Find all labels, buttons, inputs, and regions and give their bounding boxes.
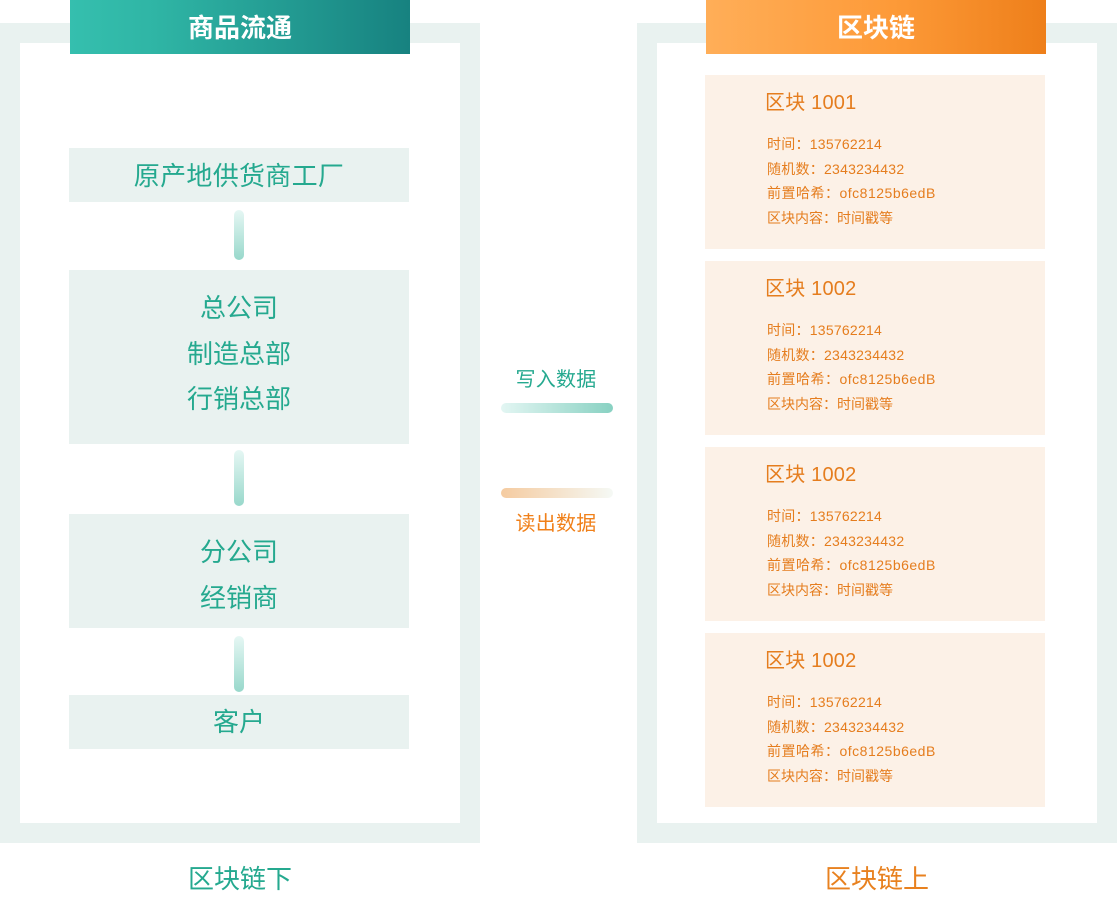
block card 1002 third: 区块内容：时间戳等 <box>767 768 893 784</box>
block card 1001: 随机数：2343234432 <box>767 161 904 177</box>
block card 1001: 区块内容：时间戳等 <box>767 210 893 226</box>
heading: blockchain: 区块链 <box>837 13 915 43</box>
panel: right blockchain frame <box>637 23 1117 843</box>
block card 1002 third: 随机数：2343234432 <box>767 719 904 735</box>
block card 1002 second: 时间：135762214 <box>767 508 882 524</box>
block card 1002 first: 区块 1002 <box>765 278 856 300</box>
block card 1002 first: 区块内容：时间戳等 <box>767 396 893 412</box>
box: customer: 客户 <box>213 707 265 737</box>
block card 1002 third: 时间：135762214 <box>767 694 882 710</box>
block card 1001: 时间：135762214 <box>767 136 882 152</box>
box: origin suppliers and factories <box>69 148 409 202</box>
block card 1002 first: 随机数：2343234432 <box>767 347 904 363</box>
box: head office <box>69 270 409 444</box>
arrow: connector two <box>234 450 244 506</box>
arrow: write data bar <box>501 403 613 413</box>
block card 1002 third: 区块 1002 <box>765 650 856 672</box>
arrow: connector one <box>234 210 244 260</box>
arrow: connector three <box>234 636 244 692</box>
caption: on-chain: 区块链上 <box>825 864 929 894</box>
box: branches and dealers: 分公司 <box>200 537 278 567</box>
block card 1002 first: 前置哈希：ofc8125b6edB <box>767 371 936 387</box>
block card 1001: 前置哈希：ofc8125b6edB <box>767 185 936 201</box>
box: head office: 总公司 <box>200 293 278 323</box>
block card 1002 first <box>705 261 1045 435</box>
caption: off-chain: 区块链下 <box>188 864 292 894</box>
block card 1002 second: 随机数：2343234432 <box>767 533 904 549</box>
block card 1002 third <box>705 633 1045 807</box>
block card 1002 second: 区块 1002 <box>765 464 856 486</box>
block card 1001 <box>705 75 1045 249</box>
block card 1002 second <box>705 447 1045 621</box>
box: origin suppliers and factories: 原产地供货商工厂 <box>134 161 344 191</box>
label: write data: 写入数据 <box>516 369 596 391</box>
box: customer <box>69 695 409 749</box>
panel: left goods circulation frame <box>0 23 480 843</box>
label: read data: 读出数据 <box>516 513 596 535</box>
block card 1002 second: 前置哈希：ofc8125b6edB <box>767 557 936 573</box>
block card 1002 second: 区块内容：时间戳等 <box>767 582 893 598</box>
box: branches and dealers <box>69 514 409 628</box>
box: head office: 制造总部 <box>187 339 291 369</box>
box: head office: 行销总部 <box>187 384 291 414</box>
heading: goods circulation <box>70 0 410 54</box>
arrow: read data bar <box>501 488 613 498</box>
heading: goods circulation: 商品流通 <box>188 13 292 43</box>
block card 1001: 区块 1001 <box>765 92 856 114</box>
block card 1002 third: 前置哈希：ofc8125b6edB <box>767 743 936 759</box>
block card 1002 first: 时间：135762214 <box>767 322 882 338</box>
heading: blockchain <box>706 0 1046 54</box>
box: branches and dealers: 经销商 <box>200 583 278 613</box>
